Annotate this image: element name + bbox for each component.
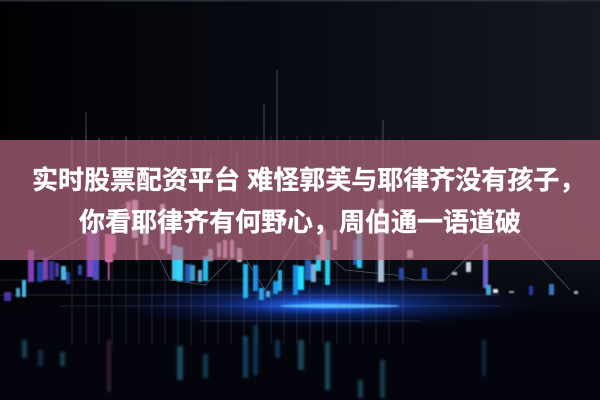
trend line bbox=[48, 200, 570, 290]
blue light glow bbox=[110, 280, 540, 328]
title line 2: 你看耶律齐有何野心，周伯通一语道破 bbox=[79, 207, 521, 237]
chart reflection bbox=[22, 325, 486, 398]
title line 1: 实时股票配资平台 难怪郭芙与耶律齐没有孩子， bbox=[32, 165, 585, 195]
chart grid bbox=[0, 135, 500, 345]
title band bbox=[0, 140, 600, 260]
candlesticks bbox=[4, 200, 578, 301]
tall wicks bbox=[72, 70, 383, 230]
